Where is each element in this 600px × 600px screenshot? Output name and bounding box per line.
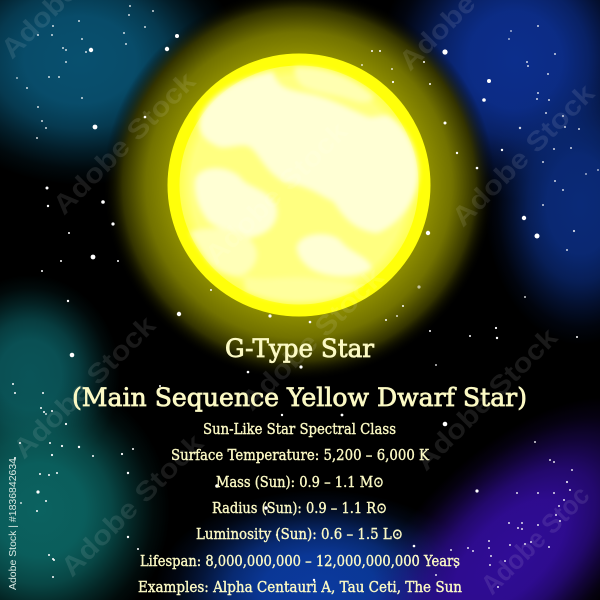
side image credit: Adobe Stock | #1836842634 xyxy=(7,458,19,590)
watermark: Adobe Stock xyxy=(7,309,162,464)
star inner disc xyxy=(180,66,418,304)
watermark: Adobe Stoc xyxy=(475,480,595,600)
mass: Mass (Sun): 0.9 – 1.1 M⊙ xyxy=(216,473,384,491)
watermark: Adobe Stock xyxy=(409,321,564,476)
star facts xyxy=(138,420,462,596)
title xyxy=(72,334,527,412)
title line 2: (Main Sequence Yellow Dwarf Star) xyxy=(72,383,527,412)
star glow xyxy=(103,0,495,381)
star rim xyxy=(168,54,430,316)
watermark: Adobe Stock xyxy=(47,65,202,220)
watermark: Adobe Stock xyxy=(235,261,390,416)
surface patches xyxy=(190,67,418,302)
examples: Examples: Alpha Centauri A, Tau Ceti, The Sun xyxy=(138,578,462,596)
surface temperature: Surface Temperature: 5,200 – 6,000 K xyxy=(171,446,430,464)
lifespan: Lifespan: 8,000,000,000 – 12,000,000,000 Years xyxy=(140,552,460,570)
luminosity: Luminosity (Sun): 0.6 – 1.5 L⊙ xyxy=(196,525,403,543)
watermark: Adobe Stock xyxy=(199,115,354,270)
radius: Radius (Sun): 0.9 – 1.1 R⊙ xyxy=(212,499,387,517)
star: yellow dwarf xyxy=(168,54,430,316)
title line 1: G-Type Star xyxy=(225,334,374,363)
watermark: Adobe Stock xyxy=(446,77,600,232)
watermark: Adobe Stock xyxy=(55,427,210,582)
spectral class: Sun-Like Star Spectral Class xyxy=(203,420,396,438)
